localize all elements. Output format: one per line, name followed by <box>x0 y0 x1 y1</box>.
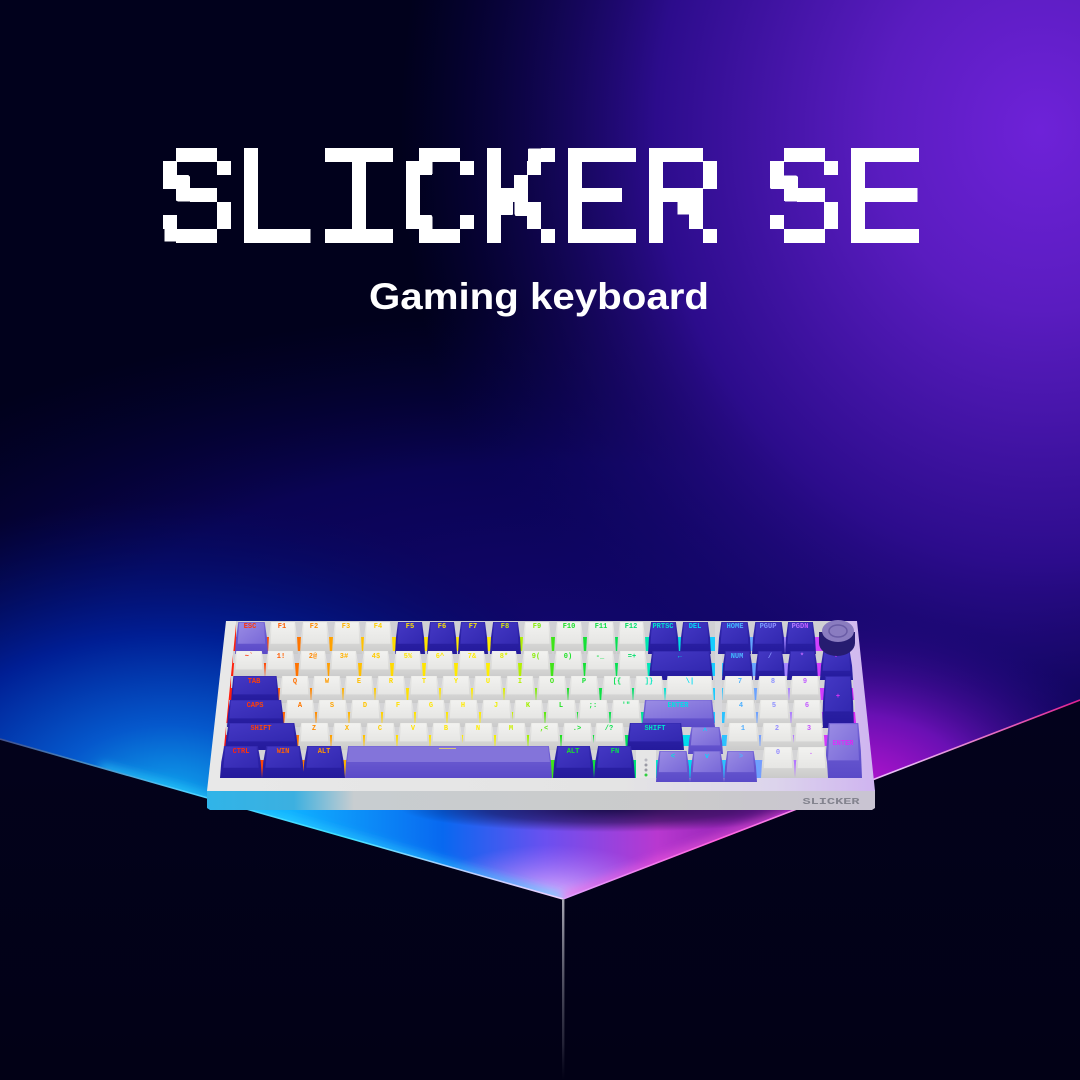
ZXCV key row: Z <box>312 725 316 733</box>
function key row: HOME <box>727 623 743 631</box>
keyboard <box>207 620 875 810</box>
volume knob <box>819 620 855 656</box>
ZXCV key row: .> <box>573 725 581 733</box>
function key row: F9 <box>533 623 541 631</box>
bottom key row: CTRL <box>233 748 249 756</box>
bottom key row: 0 <box>776 749 780 757</box>
ZXCV key row <box>225 723 862 778</box>
function key row: PGUP <box>760 623 776 631</box>
number key row: =+ <box>628 653 636 661</box>
bottom key row: < <box>671 753 675 761</box>
ZXCV key row: M <box>509 725 513 733</box>
number key row: 7& <box>468 653 477 661</box>
ASDF key row: 6 <box>805 702 809 710</box>
QWERTY key row: 7 <box>738 678 742 686</box>
ASDF key row: S <box>330 702 334 710</box>
bottom key row: > <box>739 753 743 761</box>
number key row: ← <box>678 653 683 661</box>
ASDF key row: L <box>559 702 563 710</box>
number key row: 9( <box>532 653 540 661</box>
ZXCV key row: 1 <box>741 725 745 733</box>
QWERTY key row: W <box>325 678 330 686</box>
QWERTY key row: T <box>422 678 426 686</box>
QWERTY key row: Q <box>293 678 297 686</box>
function key row: F1 <box>278 623 286 631</box>
QWERTY key row: 8 <box>771 678 775 686</box>
number key row: NUM <box>731 653 743 661</box>
number key row: 4$ <box>372 653 380 661</box>
function key row: F10 <box>563 623 575 631</box>
QWERTY key row: Y <box>454 678 459 686</box>
ZXCV key row: X <box>345 725 350 733</box>
ASDF key row: ;: <box>589 702 597 710</box>
ZXCV key row: SHIFT <box>250 725 272 733</box>
ZXCV key row: C <box>378 725 382 733</box>
ZXCV key row: ENTER <box>832 740 854 748</box>
function key row: PRTSC <box>652 623 674 631</box>
QWERTY key row: R <box>389 678 394 686</box>
ASDF key row: ENTER <box>667 702 689 710</box>
ASDF key row: F <box>396 702 400 710</box>
function key row: F3 <box>342 623 350 631</box>
ASDF key row: J <box>494 702 498 710</box>
dark floor wedge <box>0 700 1080 1080</box>
function key row <box>235 622 816 654</box>
ZXCV key row: 3 <box>807 725 811 733</box>
ASDF key row: CAPS <box>247 702 263 710</box>
ASDF key row <box>227 700 823 727</box>
ASDF key row: D <box>363 702 367 710</box>
brand label: SLICKER <box>802 797 860 807</box>
QWERTY key row: P <box>582 678 586 686</box>
QWERTY key row: O <box>550 678 554 686</box>
number key row: 0) <box>564 653 572 661</box>
number key row: * <box>800 653 804 661</box>
ZXCV key row: SHIFT <box>644 725 666 733</box>
function key row: F2 <box>310 623 318 631</box>
function key row: F12 <box>625 623 637 631</box>
bottom key row: . <box>809 749 813 757</box>
function key row: F11 <box>595 623 607 631</box>
ASDF key row: K <box>526 702 531 710</box>
ZXCV key row: ^ <box>703 727 707 736</box>
QWERTY key row: I <box>518 678 522 686</box>
bottom key row: v <box>705 753 710 761</box>
ZXCV key row: ,< <box>540 725 548 733</box>
ZXCV key row: /? <box>605 725 613 733</box>
ZXCV key row: N <box>476 725 480 733</box>
QWERTY key row: + <box>836 693 840 701</box>
number key row: 5% <box>404 653 413 661</box>
function key row: F8 <box>501 623 509 631</box>
QWERTY key row: E <box>357 678 361 686</box>
QWERTY key row: U <box>486 678 490 686</box>
number key row: 1! <box>277 653 285 661</box>
ASDF key row: 4 <box>739 702 743 710</box>
space bar mark <box>439 748 456 749</box>
QWERTY key row: TAB <box>248 678 261 686</box>
number key row: 2@ <box>309 653 318 661</box>
number key row: / <box>768 653 772 661</box>
QWERTY key row: \| <box>686 678 694 686</box>
function key row: DEL <box>689 623 701 631</box>
function key row: F6 <box>438 623 446 631</box>
ASDF key row: 5 <box>772 702 776 710</box>
number key row: 3# <box>340 653 348 661</box>
function key row: F4 <box>374 623 382 631</box>
QWERTY key row <box>231 676 854 728</box>
number key row: 8* <box>500 653 508 661</box>
QWERTY key row: [{ <box>613 678 621 686</box>
bottom key row: WIN <box>277 748 289 756</box>
subtitle: Gaming keyboard <box>369 276 709 317</box>
ZXCV key row: B <box>444 725 449 733</box>
ASDF key row: '" <box>622 702 630 710</box>
keyboard case front face <box>207 790 875 810</box>
number key row <box>233 651 853 680</box>
keyboard case top <box>207 621 875 791</box>
status LEDs <box>644 758 648 776</box>
bottom key row <box>220 746 828 782</box>
function key row: ESC <box>244 623 256 631</box>
number key row: ~` <box>245 653 253 661</box>
function key row: PGDN <box>792 623 808 631</box>
QWERTY key row: 9 <box>803 678 807 686</box>
QWERTY key row: ]} <box>645 678 653 686</box>
ASDF key row: G <box>429 702 433 710</box>
ZXCV key row: V <box>411 725 416 733</box>
number key row: 6^ <box>436 652 444 661</box>
bottom key row: FN <box>611 748 619 756</box>
bottom key row: ALT <box>318 748 330 756</box>
ZXCV key row: 2 <box>775 725 779 733</box>
ASDF key row: A <box>298 702 303 710</box>
function key row: F5 <box>406 623 414 631</box>
number key row: - <box>834 653 838 661</box>
ASDF key row: H <box>461 702 465 710</box>
rainbow backlit plate <box>221 621 861 782</box>
bottom key row: ALT <box>567 748 579 756</box>
function key row: F7 <box>469 623 477 631</box>
number key row: -_ <box>596 653 605 661</box>
